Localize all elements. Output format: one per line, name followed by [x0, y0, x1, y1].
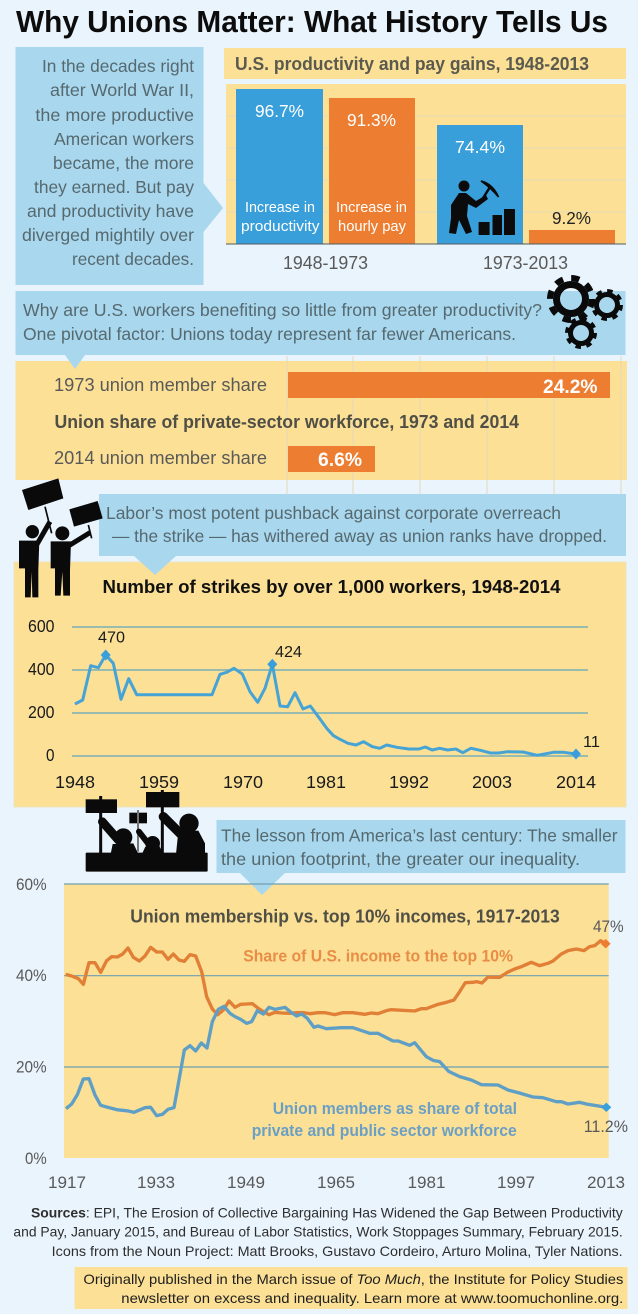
- line chart: number of strikes: 1981: [306, 772, 346, 792]
- title: Why Unions Matter: What History Tells Us: [16, 4, 608, 39]
- line chart: union membership vs top 10% incomes: Union members as share of total: [273, 1100, 517, 1118]
- panel: union share of private-sector workforce: 1973 union member share: [54, 375, 267, 395]
- callout: decades after WWII: American workers: [54, 129, 194, 149]
- bar chart: productivity and pay gains: 1973-2013: [483, 253, 568, 273]
- heading: productivity and pay: [224, 48, 626, 79]
- panel: union share of private-sector workforce: 24.2%: [543, 377, 598, 398]
- line chart: union membership vs top 10% incomes: 20%: [16, 1058, 47, 1077]
- callout: why workers benefit so little: Why are U.S. workers benefiting so little from greater productivity?: [23, 300, 542, 320]
- bar chart: productivity and pay gains: 91.3%: [347, 110, 396, 130]
- callout: labor's pushback: [99, 494, 626, 575]
- icon: miner with pickaxe and rising bars: [449, 180, 515, 235]
- bar chart: productivity and pay gains: Increase in: [245, 200, 315, 216]
- line chart: number of strikes: [28, 577, 600, 792]
- line chart: union membership vs top 10% incomes: 1917: [48, 1173, 86, 1192]
- bar chart: productivity and pay gains: 74.4%: [455, 137, 505, 157]
- line chart: union membership vs top 10% incomes: 0%: [25, 1149, 47, 1168]
- bar chart: productivity and pay gains: hourly pay: [338, 219, 407, 235]
- footer note: originally published: [74, 1267, 628, 1309]
- text block: sources: and Pay, January 2015, and Bureau of Labor Statistics, Work Stoppages Summary, February 2015.: [13, 1224, 623, 1240]
- callout: why workers benefit so little: One pivotal factor: Unions today represent far fewer Americans.: [23, 324, 516, 344]
- line chart: number of strikes: 1959: [139, 772, 179, 792]
- callout: lesson from last century: the union footprint, the greater our inequality.: [221, 849, 580, 869]
- callout: decades after WWII: In the decades right: [42, 56, 194, 76]
- callout: labor's pushback: — the strike — has withered away as union ranks have dropped.: [112, 526, 607, 546]
- callout: decades after WWII: diverged mightily over: [22, 225, 194, 245]
- icon: gears: [550, 278, 621, 347]
- text block: sources: [13, 1205, 623, 1259]
- panel: strikes chart background: [14, 562, 626, 807]
- text block: sources: Sources: EPI, The Erosion of Collective Bargaining Has Widened the Gap Between Productivity: [31, 1205, 623, 1221]
- line chart: union membership vs top 10% incomes: [16, 875, 628, 1192]
- heading: productivity and pay: U.S. productivity and pay gains, 1948-2013: [235, 53, 589, 74]
- bar chart: productivity and pay gains: 1948-1973: [283, 253, 368, 273]
- panel: union share of private-sector workforce: [16, 356, 627, 494]
- icon: two protesters with signs: [19, 478, 103, 597]
- line chart: union membership vs top 10% incomes: 1965: [317, 1173, 355, 1192]
- callout: decades after WWII: and productivity have: [27, 201, 194, 221]
- line chart: union membership vs top 10% incomes: Share of U.S. income to the top 10%: [243, 948, 513, 966]
- line chart: union membership vs top 10% incomes: 2013: [587, 1173, 625, 1192]
- line chart: union membership vs top 10% incomes: 1981: [408, 1173, 446, 1192]
- panel: union membership vs top incomes chart background: [64, 884, 609, 1158]
- footer note: originally published: Originally published in the March issue of Too Much, the Institute for Policy Studies: [83, 1271, 623, 1287]
- callout: decades after WWII: recent decades.: [72, 249, 194, 269]
- line chart: union membership vs top 10% incomes: Union membership vs. top 10% incomes, 1917-2013: [130, 907, 560, 927]
- icon: crowd with picket signs: [86, 790, 208, 872]
- line chart: union membership vs top 10% incomes: 60%: [16, 875, 47, 894]
- line chart: number of strikes: 424: [275, 644, 302, 661]
- callout: decades after WWII: after World War II,: [50, 80, 194, 100]
- line chart: number of strikes: 600: [28, 616, 55, 636]
- bar chart: productivity and pay gains: Increase in: [336, 200, 407, 216]
- line chart: number of strikes: Number of strikes by over 1,000 workers, 1948-2014: [102, 577, 560, 597]
- line chart: number of strikes: 200: [28, 702, 55, 722]
- line chart: number of strikes: 400: [28, 659, 55, 679]
- bar chart: productivity and pay gains: productivity: [241, 219, 320, 235]
- line chart: union membership vs top 10% incomes: 11.2%: [584, 1117, 628, 1136]
- line chart: number of strikes: 2014: [556, 772, 596, 792]
- callout: decades after WWII: [16, 47, 223, 285]
- bar chart: productivity and pay gains: [226, 84, 626, 273]
- callout: lesson from last century: The lesson from America’s last century: The smaller: [221, 826, 618, 846]
- bar chart: productivity and pay gains: 96.7%: [255, 101, 304, 121]
- line chart: union membership vs top 10% incomes: 47%: [593, 917, 624, 936]
- callout: decades after WWII: became, the more: [53, 153, 194, 173]
- line chart: number of strikes: 470: [98, 630, 125, 647]
- line chart: number of strikes: 1992: [389, 772, 429, 792]
- line chart: union membership vs top 10% incomes: 40%: [16, 966, 47, 985]
- line chart: number of strikes: 2003: [472, 772, 512, 792]
- panel: union share of private-sector workforce: 2014 union member share: [54, 448, 267, 468]
- line chart: union membership vs top 10% incomes: 1997: [497, 1173, 535, 1192]
- callout: labor's pushback: Labor’s most potent pushback against corporate overreach: [106, 503, 561, 523]
- callout: lesson from last century: [216, 820, 626, 895]
- line chart: union membership vs top 10% incomes: 1933: [137, 1173, 175, 1192]
- panel: union share of private-sector workforce: 6.6%: [318, 450, 362, 471]
- bar chart: productivity and pay gains: 9.2%: [552, 208, 591, 228]
- line chart: union membership vs top 10% incomes: private and public sector workforce: [252, 1122, 517, 1140]
- callout: decades after WWII: the more productive: [35, 105, 194, 125]
- line chart: number of strikes: 11: [583, 734, 600, 751]
- line chart: union membership vs top 10% incomes: 1949: [227, 1173, 265, 1192]
- footer note: originally published: newsletter on excess and inequality. Learn more at www.toomuchonline.org.: [121, 1290, 623, 1306]
- text block: sources: Icons from the Noun Project: Matt Brooks, Gustavo Cordeiro, Arturo Molina, Tyler Nations.: [52, 1243, 623, 1259]
- line chart: number of strikes: 1948: [55, 772, 95, 792]
- callout: decades after WWII: they earned. But pay: [34, 177, 194, 197]
- callout: why workers benefit so little: [16, 291, 626, 369]
- line chart: number of strikes: 0: [46, 745, 55, 765]
- line chart: number of strikes: 1970: [223, 772, 263, 792]
- panel: union share of private-sector workforce: Union share of private-sector workforce, 1973 and 2014: [54, 412, 519, 432]
